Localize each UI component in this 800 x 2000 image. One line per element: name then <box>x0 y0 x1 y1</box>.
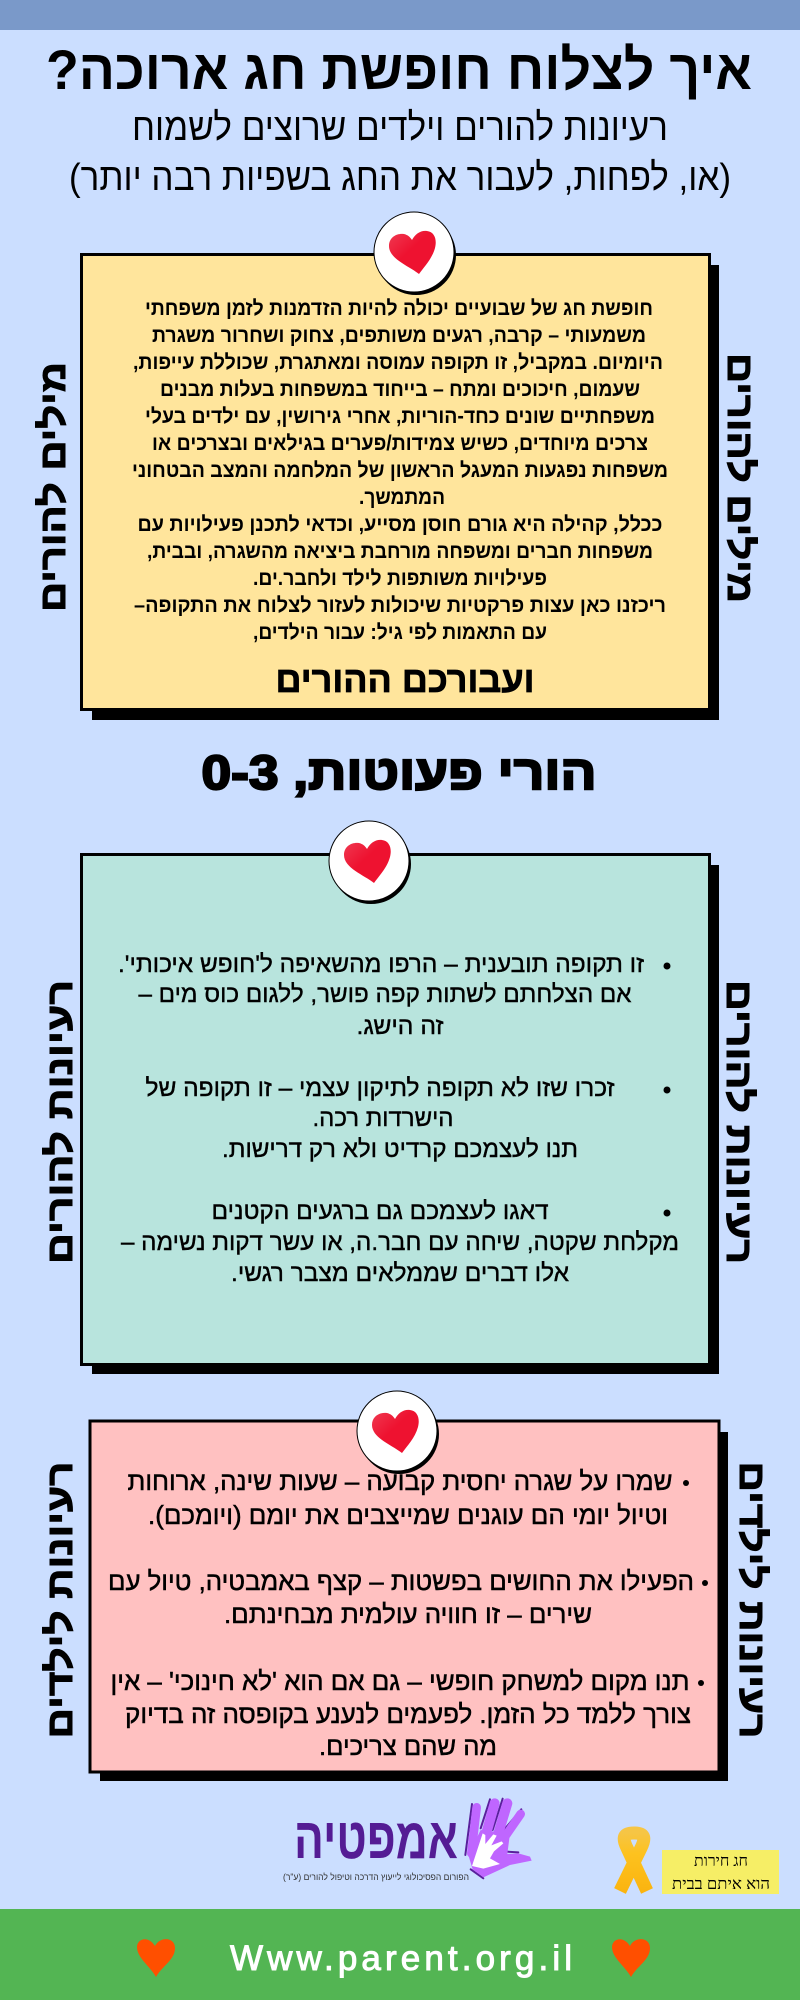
bullet list: אלו דברים שממלאים מצבר רגשי. <box>231 1260 569 1287</box>
intro text: משמעותי – קרבה, רגעים משותפים, צחוק ושחרור משגרת <box>152 324 646 347</box>
bullet list: זכרו שזו לא תקופה לתיקון עצמי – זו תקופה של <box>146 1075 615 1102</box>
icon: heart badge, pink panel <box>357 1391 439 1474</box>
side label: right, words to parents: מילים להורים <box>720 353 761 603</box>
side label: left, ideas for children: רעיונות לילדים <box>39 1462 80 1738</box>
intro text: חופשת חג של שבועיים יכולה להיות הזדמנות לזמן משפחתי <box>145 297 653 320</box>
intro text: המתמשך. <box>359 486 445 509</box>
intro text: צרכים מיוחדים, כשיש צמידות/פערים בגילאים ובצרכים או <box>152 432 648 455</box>
logo wordmark: אמפטיה <box>294 1806 458 1871</box>
logo tagline: הפורום הפסיכולוגי לייעוץ הדרכה וטיפול להורים (ע"ר) <box>283 1872 469 1882</box>
bullet list: הפעילו את החושים בפשטות – קצף באמבטיה, טיול עם <box>108 1566 694 1596</box>
bullet list: דאגו לעצמכם גם ברגעים הקטנים <box>212 1198 548 1225</box>
intro text: שעמום, חיכוכים ומתח – בייחוד במשפחות בעלות מבנים <box>160 378 640 401</box>
bullet list: הישרדות רכה. <box>312 1105 454 1132</box>
intro text: עם התאמות לפי גיל: עבור הילדים, <box>253 621 547 644</box>
side label: left, words to parents: מילים להורים <box>32 362 73 612</box>
footer band <box>0 1909 800 2000</box>
bullet list: שירים – זו חוויה עולמית מבחינתם. <box>224 1599 592 1629</box>
bullet list: אם הצלחתם לשתות קפה פושר, ללגום כוס מים – <box>138 981 632 1008</box>
intro text: היומיום. במקביל, זו תקופה עמוסה ומאתגרת, שכוללת עייפות, <box>133 351 663 374</box>
bullet list: מקלחת שקטה, שיחה עם חבר.ה, או עשר דקות נשימה – <box>121 1229 679 1256</box>
icon: yellow ribbon <box>620 1833 647 1891</box>
title: איך לצלוח חופשת חג ארוכה? <box>46 38 752 101</box>
icon: adult and child hands <box>465 1799 532 1878</box>
yellow note <box>662 1850 779 1894</box>
side label: left, ideas for parents: רעיונות להורים <box>39 980 80 1264</box>
icon: orange heart right <box>612 1939 650 1977</box>
intro text: ריכזנו כאן עצות פרקטיות שיכולות לעזור לצלוח את התקופה– <box>134 594 666 617</box>
icon: heart badge, green panel <box>329 821 411 904</box>
section heading: הורי פעוטות, 0-3 <box>202 747 596 800</box>
bullet list: מה שהם צריכים. <box>319 1731 497 1761</box>
intro text: משפחתיים שונים כחד-הוריות, אחרי גירושין, עם ילדים בעלי <box>145 405 655 428</box>
bullet list: שמרו על שגרה יחסית קבועה – שעות שינה, ארוחות <box>128 1466 672 1496</box>
yellow note: חג חירות <box>694 1853 748 1870</box>
bullet list: תנו מקום למשחק חופשי – גם אם הוא 'לא חינוכי' – אין <box>110 1666 690 1696</box>
bullet list: זו תקופה תובענית – הרפו מהשאיפה ל'חופש איכותי'. <box>118 951 644 978</box>
panel: ideas for parents <box>82 854 719 1374</box>
closing line: ועבורכם ההורים <box>276 659 534 700</box>
intro text: משפחות נפגעות המעגל הראשון של המלחמה והמצב הבטחוני <box>132 459 668 482</box>
bullet list: צורך ללמד כל הזמן. לפעמים לנענע בקופסה זה בדיוק <box>125 1699 691 1729</box>
bullet list <box>118 951 679 1287</box>
bullet list <box>108 1466 708 1761</box>
subtitle: (או, לפחות, לעבור את החג בשפיות רבה יותר) <box>69 157 731 199</box>
bullet list: זה הישג. <box>356 1013 444 1040</box>
intro text: פעילויות משותפות לילד ולחבר.ים. <box>253 567 547 590</box>
panel: words to parents <box>82 254 719 720</box>
website address: Www.parent.org.il <box>230 1939 572 1978</box>
side label: right, ideas for children: רעיונות לילדים <box>732 1462 773 1738</box>
top band <box>0 0 800 30</box>
yellow note: הוא איתם בבית <box>672 1876 770 1893</box>
intro text: ככלל, קהילה היא גורם חוסן מסייע, וכדאי לתכנן פעילויות עם <box>138 513 662 536</box>
intro text: משפחות חברים ומשפחה מורחבת ביציאה מהשגרה, ובבית, <box>147 540 653 563</box>
icon: orange heart left <box>137 1939 175 1977</box>
logo: Empathy forum <box>283 1799 532 1882</box>
bullet list: תנו לעצמכם קרדיט ולא רק דרישות. <box>222 1136 578 1163</box>
intro text <box>132 297 668 644</box>
panel: ideas for children <box>90 1421 728 1781</box>
side label: right, ideas for parents: רעיונות להורים <box>719 980 760 1264</box>
icon: heart badge, yellow panel <box>374 212 456 295</box>
bullet list: וטיול יומי הם עוגנים שמייצבים את יומם (ויומכם). <box>148 1500 668 1530</box>
subtitle <box>69 107 731 199</box>
subtitle: רעיונות להורים וילדים שרוצים לשמוח <box>132 107 668 149</box>
